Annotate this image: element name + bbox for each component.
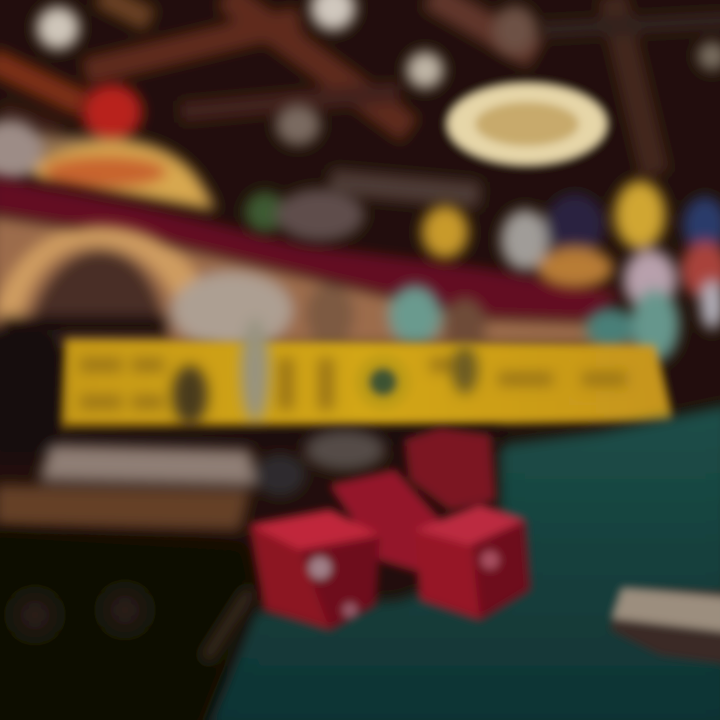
maroon band (0, 176, 620, 322)
red dice stack (250, 428, 530, 630)
ceiling lights (37, 0, 720, 145)
green felt table (205, 405, 720, 720)
yellow sign with illegible lettering (60, 318, 672, 430)
bar counter (0, 430, 385, 530)
background colourful figures (245, 181, 720, 361)
mid wall and arch (0, 215, 660, 353)
die: left (250, 510, 380, 630)
dark strip under sign (60, 426, 500, 446)
die: middle back (330, 470, 440, 575)
ceiling beams (0, 0, 720, 195)
grey card box on felt (610, 588, 720, 665)
left dark pillar (0, 330, 60, 455)
dark foreground panel (0, 530, 255, 720)
die: right (415, 505, 530, 620)
die: top (405, 428, 495, 510)
carousel dome (0, 84, 215, 210)
oval hanging sign (447, 83, 607, 165)
